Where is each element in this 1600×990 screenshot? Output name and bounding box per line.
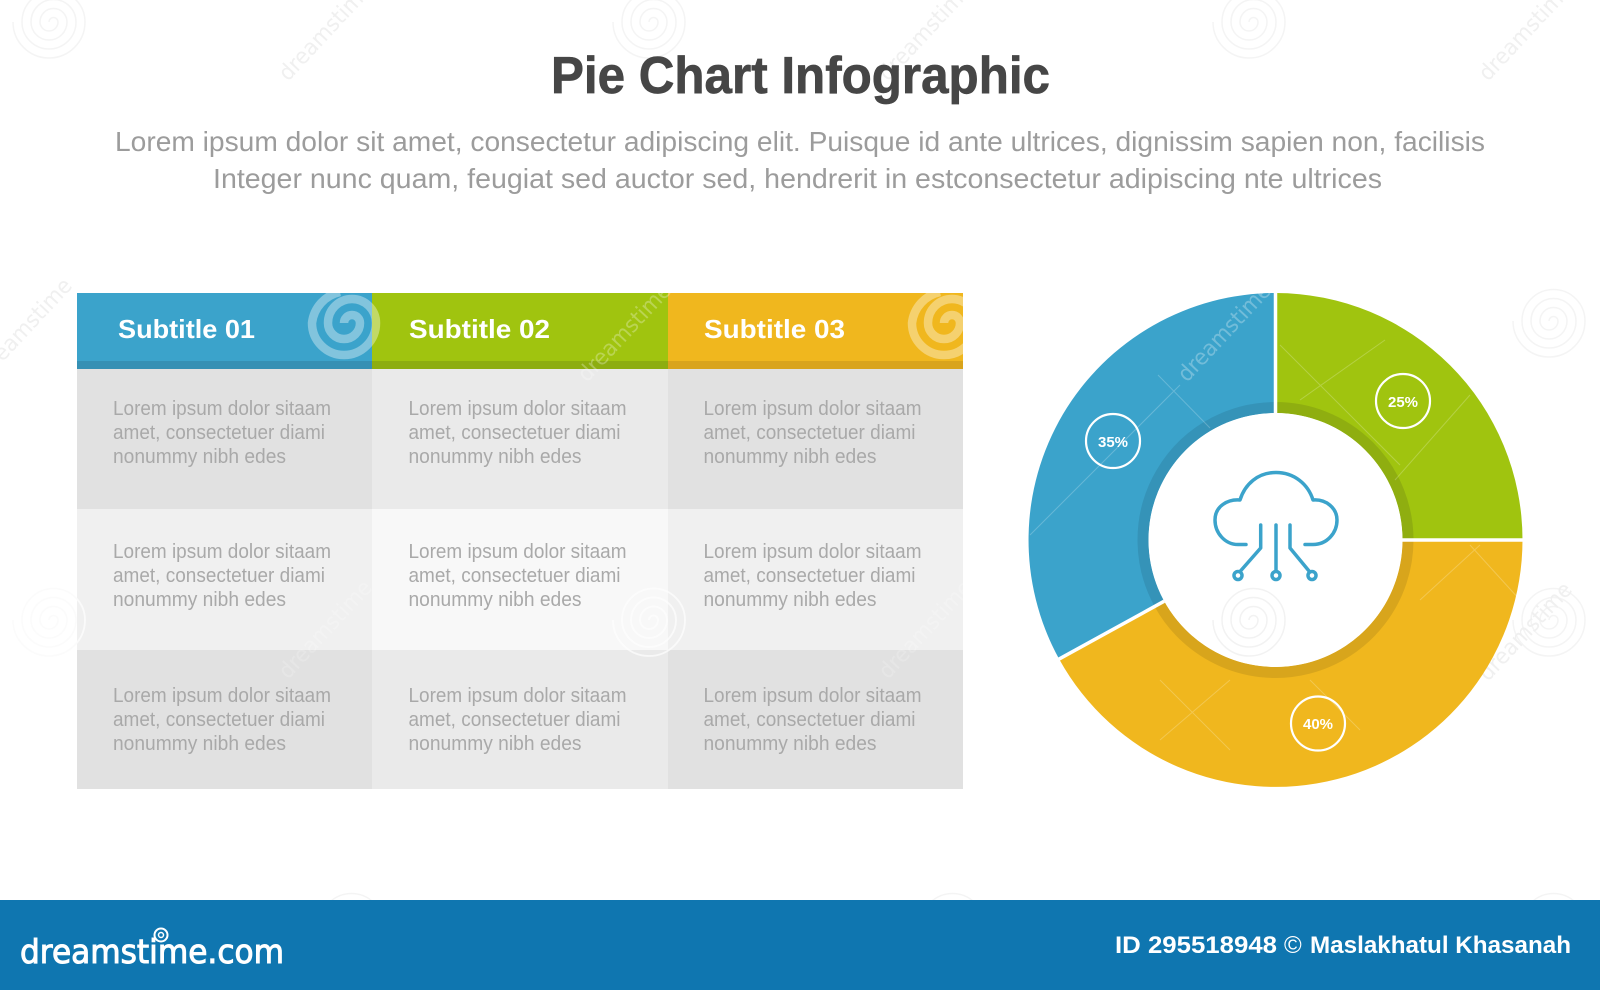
table body text: amet, consectetuer diami [704, 709, 916, 731]
badge: 25% [1376, 374, 1430, 428]
table body text: Lorem ipsum dolor sitaam [113, 541, 331, 563]
footer bar [0, 900, 1600, 990]
table body text: nonummy nibh edes [408, 589, 582, 611]
badge: 25%: 25% [1388, 394, 1418, 411]
table body text: Lorem ipsum dolor sitaam [408, 398, 626, 420]
header watermark spirals [312, 292, 976, 355]
table body text: nonummy nibh edes [704, 446, 876, 468]
header: subtitle 01: Subtitle 01 [118, 314, 255, 344]
panel: comparison table [77, 293, 963, 789]
badge: 40%: 40% [1303, 716, 1333, 733]
segment: yellow 40% [1059, 540, 1522, 787]
table body text: nonummy nibh edes [113, 733, 286, 755]
table body text: Lorem ipsum dolor sitaam [704, 541, 922, 563]
table body text: Lorem ipsum dolor sitaam [704, 398, 922, 420]
badge: 35%: 35% [1098, 434, 1128, 451]
background watermark: dreamstime [1474, 578, 1578, 686]
table body text: Lorem ipsum dolor sitaam [113, 685, 331, 707]
table body text: amet, consectetuer diami [113, 565, 325, 587]
footer credit: ID 295518948 [1115, 932, 1277, 959]
inner shadow ring [1143, 408, 1408, 672]
footer logo: dreamstime.com [20, 932, 284, 971]
table body text: amet, consectetuer diami [113, 709, 325, 731]
description text: Lorem ipsum dolor sit amet, consectetur adipiscing elit. Puisque id ante ultrices, dignissim sapien non, facilisis [115, 126, 1485, 157]
centre circle [1148, 413, 1402, 667]
centre watermark [1213, 588, 1285, 656]
segment: blue 35% [1029, 293, 1276, 659]
table body text: nonummy nibh edes [408, 446, 582, 468]
donut chart [1029, 279, 1525, 787]
table body text: nonummy nibh edes [704, 589, 876, 611]
header: subtitle 01 [77, 293, 372, 369]
table body text: nonummy nibh edes [113, 589, 286, 611]
donut watermark text: dreamstime [1173, 279, 1277, 387]
description text [115, 126, 1485, 194]
header: subtitle 03 [668, 293, 963, 369]
table body text: nonummy nibh edes [113, 446, 286, 468]
table body text: nonummy nibh edes [408, 733, 582, 755]
table body text: amet, consectetuer diami [704, 422, 916, 444]
table body text: amet, consectetuer diami [408, 422, 620, 444]
table body text: amet, consectetuer diami [408, 565, 620, 587]
title: Pie Chart Infographic [551, 47, 1050, 105]
table cell backgrounds [77, 369, 963, 789]
segment: green 25% [1276, 293, 1522, 540]
header: subtitle 02: Subtitle 02 [409, 314, 550, 344]
table body text: amet, consectetuer diami [408, 709, 620, 731]
footer credit: Maslakhatul Khasanah [1310, 932, 1571, 959]
table body text: Lorem ipsum dolor sitaam [408, 541, 626, 563]
table watermark: dreamstime [874, 576, 978, 684]
description text: Integer nunc quam, feugiat sed auctor sed, hendrerit in estconsectetur adipiscing nte ultrices [213, 163, 1382, 194]
table watermark: dreamstime [274, 576, 378, 684]
footer credit [1115, 932, 1571, 959]
table body text: amet, consectetuer diami [113, 422, 325, 444]
header: subtitle 03: Subtitle 03 [704, 314, 845, 344]
badge: 40% [1291, 696, 1345, 750]
table watermark [13, 576, 978, 684]
badge: 35% [1086, 414, 1140, 468]
segment separators [1057, 288, 1525, 660]
table body text [113, 398, 922, 755]
header watermark text: dreamstime [573, 279, 677, 387]
header: subtitle 02 [372, 293, 668, 369]
table body text: Lorem ipsum dolor sitaam [408, 685, 626, 707]
table body text: amet, consectetuer diami [704, 565, 916, 587]
table body text: nonummy nibh edes [704, 733, 876, 755]
footer credit: © [1284, 932, 1302, 959]
table body text: Lorem ipsum dolor sitaam [704, 685, 922, 707]
icon: cloud network [1215, 472, 1337, 580]
table body text: Lorem ipsum dolor sitaam [113, 398, 331, 420]
